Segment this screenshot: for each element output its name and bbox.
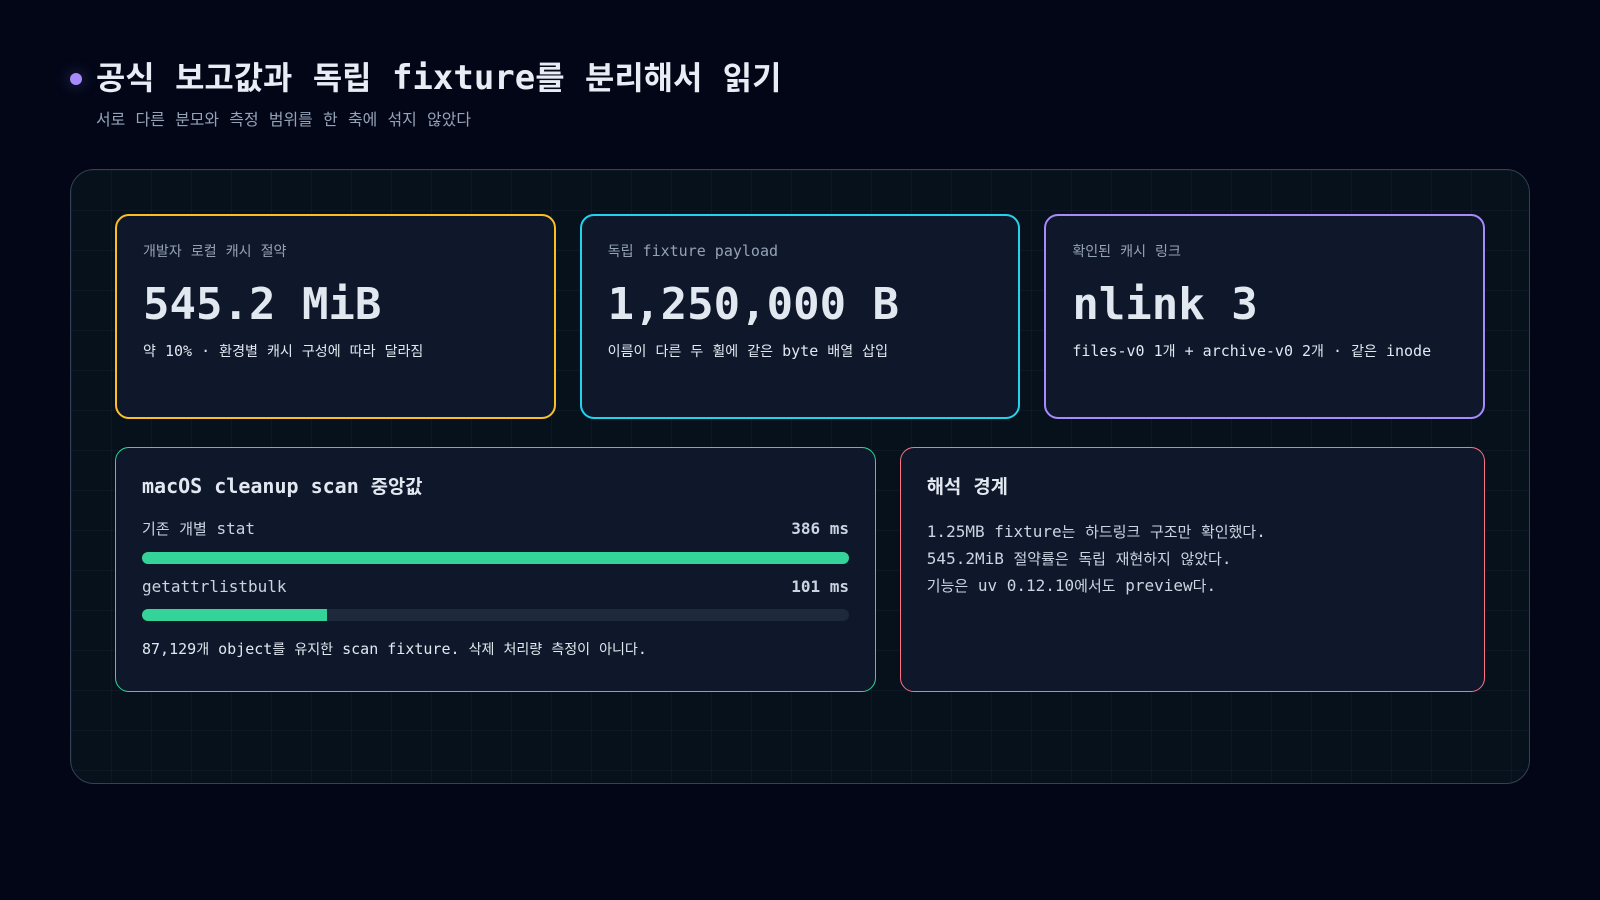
stat card: cache links: nlink 3 [1072, 279, 1258, 330]
bar label: stat: 기존 개별 stat [142, 518, 255, 539]
bar: stat [142, 552, 849, 564]
stat card: local cache savings: 개발자 로컬 캐시 절약 [143, 241, 286, 261]
stat card: local cache savings: 약 10% · 환경별 캐시 구성에 따라 달라짐 [143, 341, 423, 361]
panel heading: 해석 경계 [927, 472, 1008, 499]
panel heading: macOS cleanup scan 중앙값 [142, 472, 423, 499]
panel: macOS cleanup scan [115, 447, 876, 692]
stat card: cache links: 확인된 캐시 링크 [1072, 241, 1181, 261]
stat card: local cache savings [115, 214, 556, 419]
stat card: fixture payload: 1,250,000 B [608, 279, 899, 330]
main panel [70, 169, 1530, 784]
scan note: 87,129개 object를 유지한 scan fixture. 삭제 처리량 측정이 아니다. [142, 639, 647, 659]
bar label: getattrlistbulk: getattrlistbulk [142, 577, 286, 596]
bar value: stat: 386 ms [791, 519, 849, 538]
stat card: cache links: files-v0 1개 + archive-v0 2개 · 같은 inode [1072, 341, 1431, 361]
subtitle: 서로 다른 분모와 측정 범위를 한 축에 섞지 않았다 [96, 107, 471, 130]
boundary text: 1.25MB fixture는 하드링크 구조만 확인했다. 545.2MiB 절약률은 독립 재현하지 않았다. 기능은 uv 0.12.10에서도 preview다. [927, 521, 1266, 596]
title dot icon [70, 73, 82, 85]
bar value: getattrlistbulk: 101 ms [791, 577, 849, 596]
stat card: fixture payload: 이름이 다른 두 휠에 같은 byte 배열 삽입 [608, 341, 888, 361]
bar: getattrlistbulk [142, 609, 849, 621]
stat card: fixture payload: 독립 fixture payload [608, 241, 778, 261]
stat card: local cache savings: 545.2 MiB [143, 279, 381, 330]
stat card: cache links [1044, 214, 1485, 419]
title: 공식 보고값과 독립 fixture를 분리해서 읽기 [96, 53, 781, 99]
panel: interpretation boundary [900, 447, 1485, 692]
stat card: fixture payload [580, 214, 1020, 419]
